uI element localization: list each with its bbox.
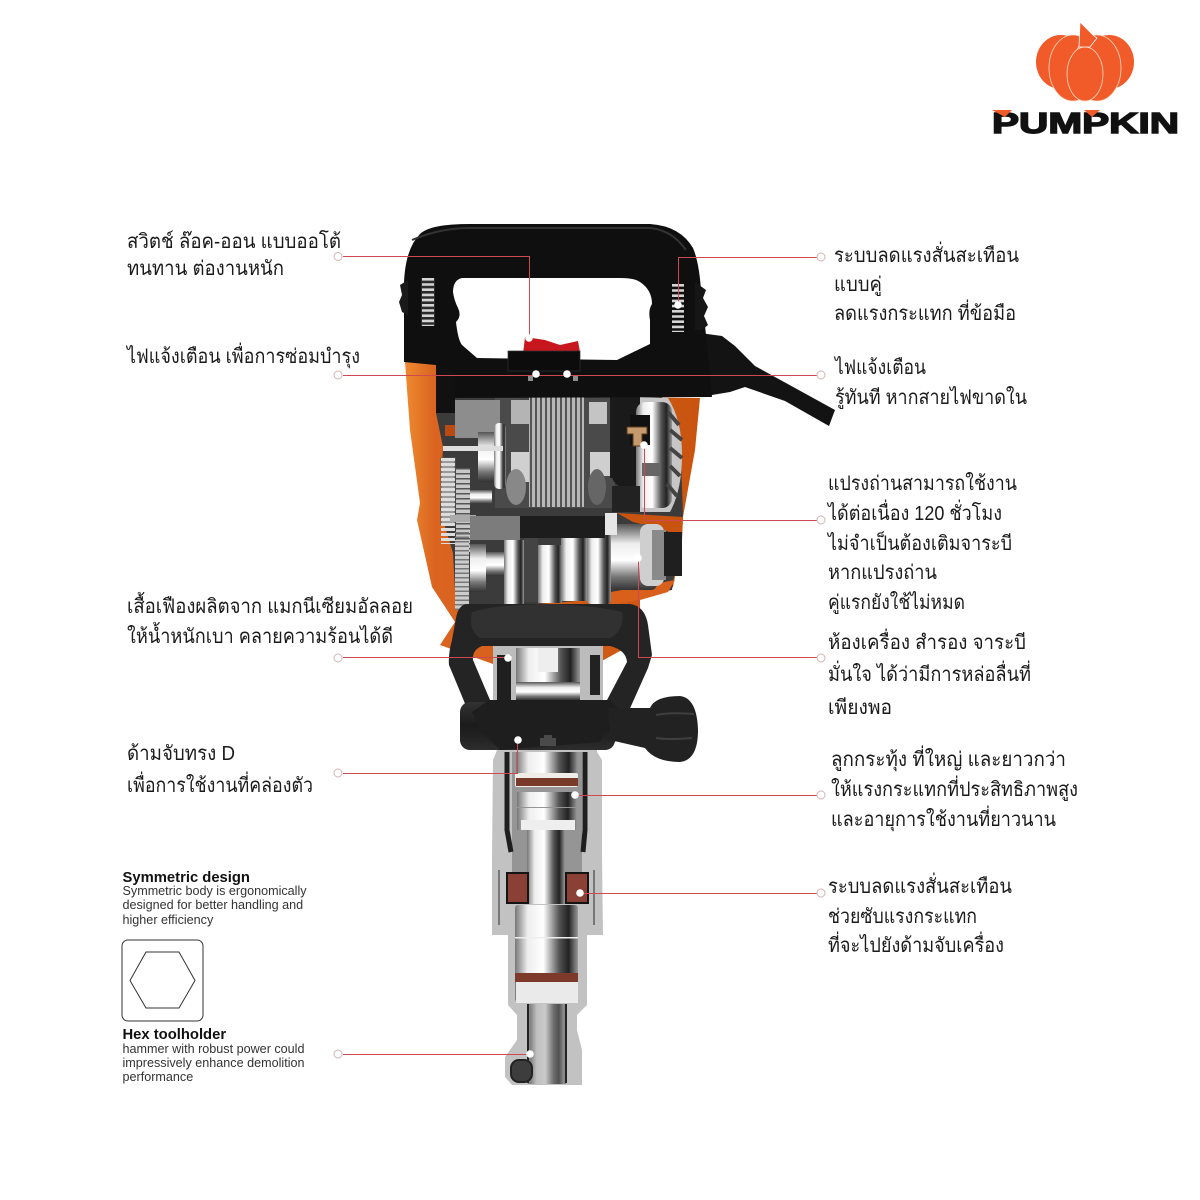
callout: anti-vibration: ช่วยซับแรงกระแทก xyxy=(828,906,977,928)
callout: striker: ลูกกระทุ้ง ที่ใหญ่ และยาวกว่า xyxy=(831,745,1066,772)
callout: anti-vibration xyxy=(828,872,1012,957)
feature: symmetric design: Symmetric design xyxy=(122,870,250,886)
hammer illustration xyxy=(399,224,835,1085)
trigger switch xyxy=(508,337,580,381)
gears lower and pinion xyxy=(455,513,682,610)
callout: dual vibration system xyxy=(834,241,1019,325)
feature: hex toolholder: Hex toolholder xyxy=(122,1027,226,1043)
left callouts xyxy=(125,230,413,797)
logo wordmark: PUMPKIN xyxy=(992,108,1179,140)
callout: carbon brushes: คู่แรกยังใช้ไม่หมด xyxy=(828,591,965,615)
feature: hex toolholder xyxy=(122,1027,305,1084)
callout: cable warning light: ไฟแจ้งเตือน xyxy=(833,356,926,379)
vibration springs xyxy=(421,278,678,332)
callout: D handle: ด้ามจับทรง D xyxy=(127,743,235,765)
impact striker xyxy=(516,752,578,774)
leader lines xyxy=(343,256,817,1054)
logo: Pumpkin xyxy=(992,22,1179,140)
callout: striker: และอายุการใช้งานที่ยาวนาน xyxy=(831,805,1056,832)
piston xyxy=(515,905,578,1002)
feature: hex toolholder: impressively enhance demolition xyxy=(122,1056,305,1070)
feature: hex toolholder: performance xyxy=(122,1070,193,1084)
callout: carbon brushes: หากแปรงถ่าน xyxy=(828,562,937,584)
callout: switch: ทนทาน ต่องานหนัก xyxy=(127,258,284,280)
callout: grease chamber: เพียงพอ xyxy=(828,697,892,719)
icon: hex toolholder xyxy=(122,940,203,1021)
callout: anti-vibration: ที่จะไปยังด้ามจับเครื่อง xyxy=(828,931,1004,957)
icon: pumpkin xyxy=(1036,22,1134,101)
inner cavity xyxy=(436,395,683,610)
leader: toolholder xyxy=(343,1054,530,1056)
callout: carbon brushes: ได้ต่อเนื่อง 120 ชั่วโมง xyxy=(826,499,1002,525)
right callouts xyxy=(826,241,1078,957)
carbon brush xyxy=(627,427,647,446)
leader: striker xyxy=(575,794,817,796)
motor: brush holder and cooling fan xyxy=(610,378,682,512)
top handle xyxy=(399,224,712,413)
callout: D handle: เพื่อการใช้งานที่คล่องตัว xyxy=(127,771,313,797)
motor: stator xyxy=(495,397,615,508)
leader: switch xyxy=(343,256,530,336)
callout: grease chamber xyxy=(828,628,1031,719)
feature: symmetric design: higher efficiency xyxy=(122,913,214,927)
leader end points xyxy=(334,252,825,1058)
callout: switch: สวิตช์ ล๊อค-ออน แบบออโต้ xyxy=(127,230,341,253)
D-handle xyxy=(449,604,698,762)
callout: grease chamber: มั่นใจ ได้ว่ามีการหล่อลื่นที่ xyxy=(828,660,1031,686)
callout: cable warning light xyxy=(833,356,1027,410)
callout: dual vibration system: แบบคู่ xyxy=(834,274,882,297)
leader: damper xyxy=(580,892,817,894)
callout: cable warning light: รู้ทันที หากสายไฟขาดใน xyxy=(835,386,1027,410)
rubber damper blocks xyxy=(507,873,528,903)
callout: maintenance light: ไฟแจ้งเตือน เพื่อการซ่อมบำรุง xyxy=(125,342,360,369)
callout: striker xyxy=(831,745,1078,832)
feature: symmetric design: Symmetric body is ergonomically xyxy=(122,884,307,898)
callout: gear housing: ให้น้ำหนักเบา คลายความร้อนได้ดี xyxy=(127,622,393,648)
callout: gear housing xyxy=(127,592,413,648)
leader: magnesium housing xyxy=(343,656,508,658)
callout: dual vibration system: ลดแรงกระแทก ที่ข้อมือ xyxy=(834,299,1016,325)
motor: armature shaft and bearing xyxy=(443,400,506,504)
feature: hex toolholder: hammer with robust power could xyxy=(122,1042,304,1056)
leader: warning light xyxy=(343,374,817,376)
feature: symmetric design: designed for better handling and xyxy=(122,898,303,912)
callout: carbon brushes: แปรงถ่านสามารถใช้งาน xyxy=(828,472,1017,495)
callout: switch xyxy=(127,230,341,280)
callout: anti-vibration: ระบบลดแรงสั่นสะเทือน xyxy=(828,872,1012,898)
callout: grease chamber: ห้องเครื่อง สำรอง จาระบี xyxy=(828,628,1026,654)
side knob xyxy=(608,696,698,762)
callout: dual vibration system: ระบบลดแรงสั่นสะเทือน xyxy=(834,241,1019,267)
lower barrel xyxy=(492,750,603,1085)
callout: carbon brushes: ไม่จำเป็นต้องเติมจาระบี xyxy=(826,530,1012,555)
orange gearbox housing xyxy=(405,362,700,664)
leader: grease xyxy=(638,558,817,658)
callout: D handle xyxy=(127,743,313,797)
leader: D handle xyxy=(343,740,518,774)
callout: carbon brushes xyxy=(826,472,1017,615)
callout: gear housing: เสื้อเฟืองผลิตจาก แมกนีเซียมอัลลอย xyxy=(127,592,413,618)
leader: brush xyxy=(644,445,817,520)
gears upper xyxy=(441,458,476,552)
feature: symmetric design xyxy=(122,870,307,927)
leader: dual vibration xyxy=(678,258,817,305)
callout: striker: ให้แรงกระแทกที่ประสิทธิภาพสูง xyxy=(831,775,1078,802)
tool shank xyxy=(528,1004,566,1084)
power cable xyxy=(700,333,835,426)
